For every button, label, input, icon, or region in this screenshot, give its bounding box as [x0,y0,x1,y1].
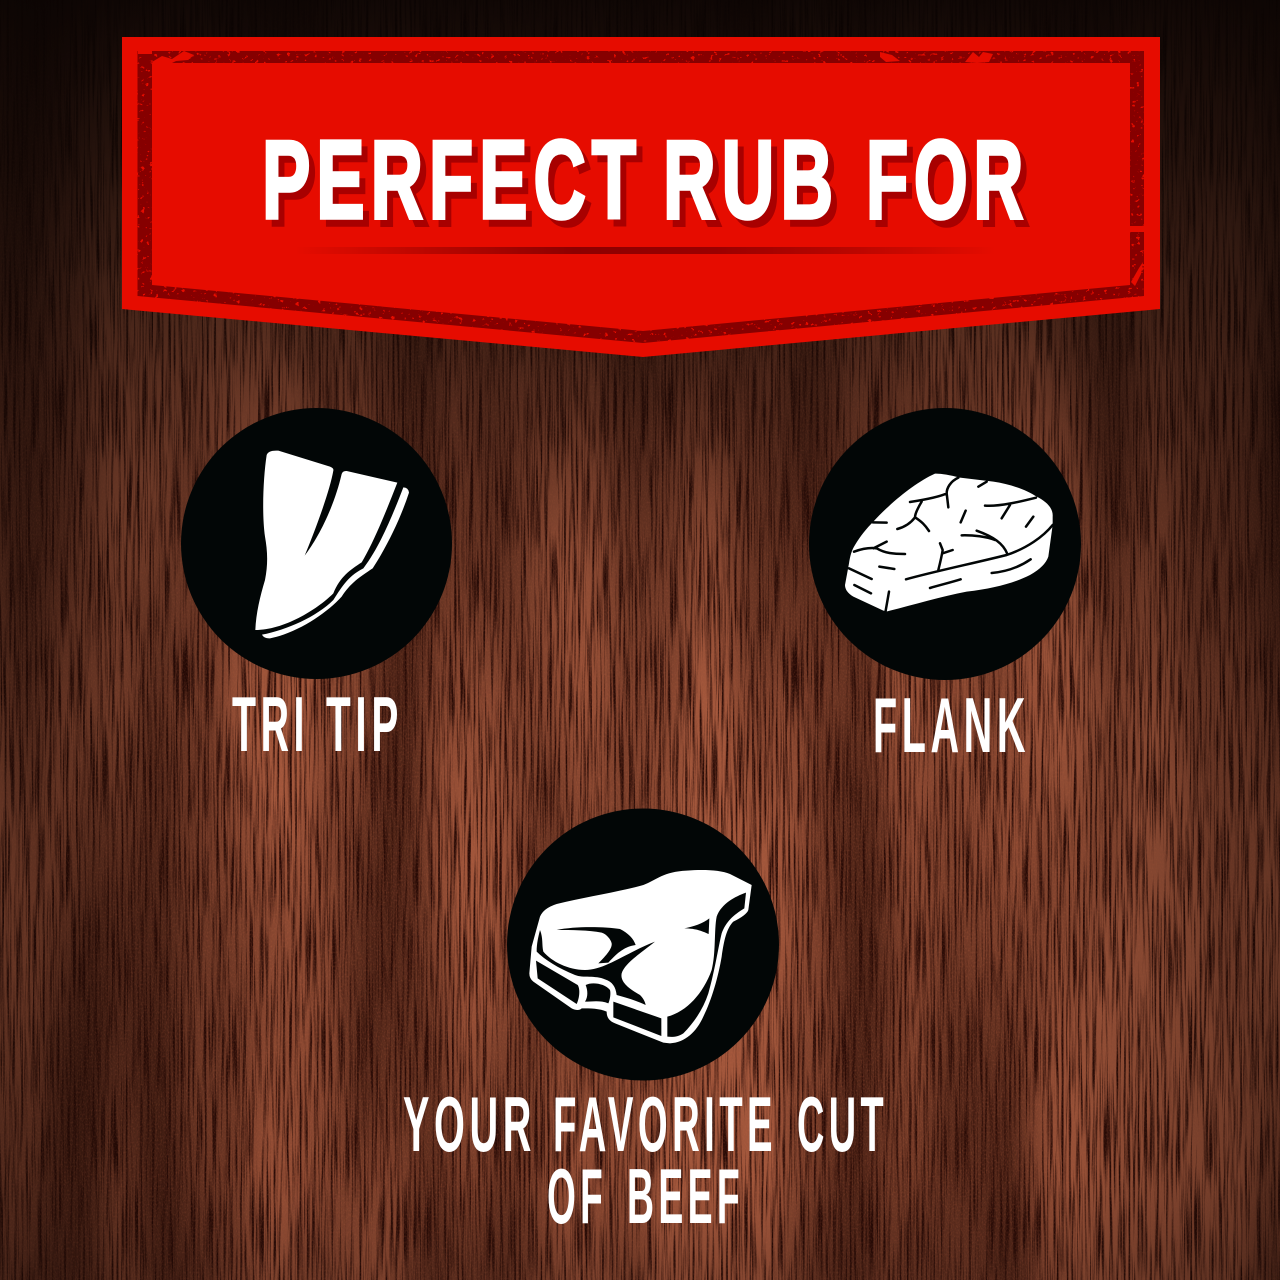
label: your favorite cut of beef: YOUR [403,1080,536,1168]
panel: red title banner [122,37,1160,357]
icon: tri tip cut [181,408,452,679]
title: Perfect Rub For: PERFECT [268,125,648,249]
label: your favorite cut of beef: FAVORITE [553,1080,777,1168]
label: tri tip: TRI [232,680,309,768]
title: Perfect Rub For: RUB [669,125,845,249]
panel: tri tip [181,408,452,768]
title: Perfect Rub For: RUB [663,118,839,242]
title: Perfect Rub For: PERFECT [262,118,642,242]
title: Perfect Rub For: FOR [872,125,1035,249]
text: CUT [797,1080,888,1168]
panel: flank [809,408,1081,769]
label: tri tip: TIP [326,680,403,768]
label: flank: FLANK [873,681,1030,769]
label: your favorite cut of beef: OF [547,1152,607,1240]
icon: t-bone steak [507,808,779,1080]
title: Perfect Rub For: FOR [866,118,1029,242]
label: your favorite cut of beef: BEEF [627,1152,744,1240]
icon: flank steak [809,408,1081,680]
panel: favorite cut of beef [403,808,888,1240]
label: your favorite cut of beef [403,1080,888,1240]
